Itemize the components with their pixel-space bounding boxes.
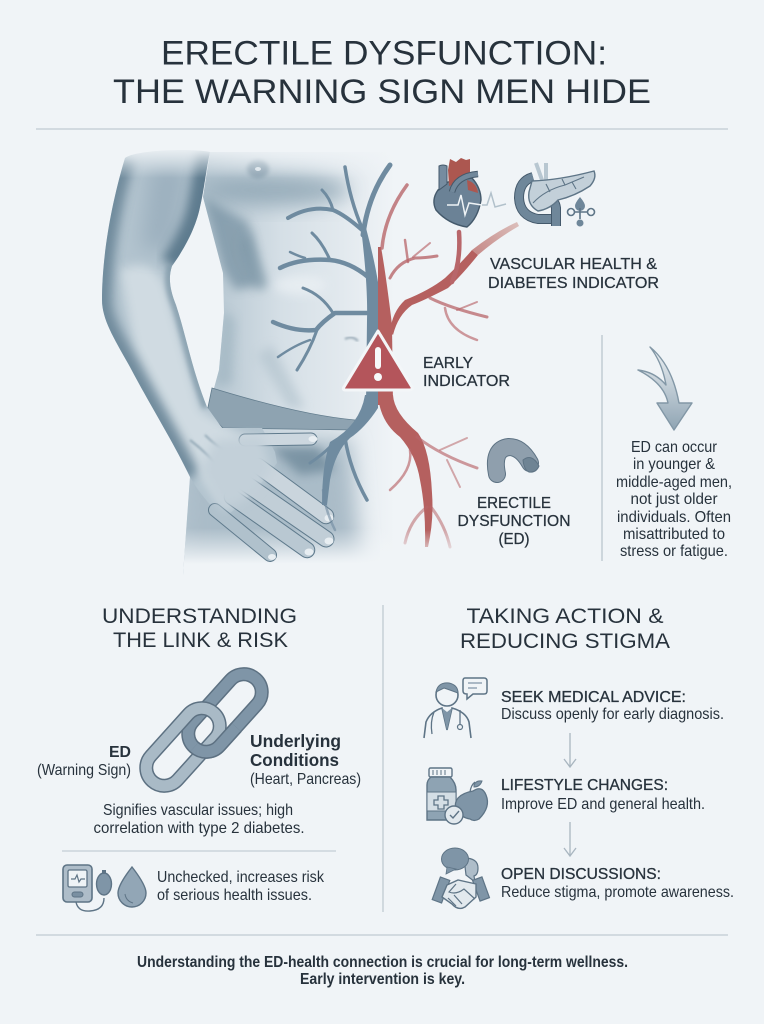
- waistband: [207, 388, 355, 430]
- text: seek medical advice: SEEK MEDICAL ADVICE:: [501, 689, 686, 706]
- icon: pancreas with droplets: [519, 163, 595, 226]
- label: vascular health: DIABETES INDICATOR: [488, 275, 659, 292]
- heading: taking action and reducing stigma: [460, 605, 670, 653]
- callout: age note: misattributed to: [623, 526, 725, 543]
- footer: Early intervention is key.: [300, 971, 465, 988]
- label: ED warning sign: [37, 744, 131, 779]
- title: ERECTILE DYSFUNCTION:: [161, 34, 607, 72]
- icon: heart with ECG: [434, 158, 506, 227]
- heading: taking action and reducing stigma: REDUCING STIGMA: [460, 630, 670, 653]
- label: erectile dysfunction: [458, 495, 570, 548]
- arm and hand: [102, 150, 277, 513]
- text: open discussions: Reduce stigma, promote awareness.: [501, 884, 734, 901]
- label: vascular health: VASCULAR HEALTH &: [490, 256, 657, 273]
- label: underlying conditions: [250, 731, 361, 788]
- label: vascular health: [488, 256, 659, 292]
- text: seek medical advice: [501, 689, 724, 723]
- callout: age note: ED can occur: [631, 439, 718, 456]
- fingers: [215, 436, 334, 560]
- heading: taking action and reducing stigma: TAKING ACTION &: [466, 605, 664, 628]
- footer: Understanding the ED-health connection is crucial for long-term wellness.: [137, 954, 628, 971]
- text: link explanation: Signifies vascular issues; high: [103, 802, 293, 819]
- icon: doctor with speech bubble: [424, 678, 487, 738]
- callout: age note: in younger &: [633, 456, 715, 473]
- label: underlying conditions: Conditions: [250, 750, 339, 770]
- title: [113, 34, 651, 111]
- text: risk note: Unchecked, increases risk: [157, 869, 325, 886]
- icon: curved down arrow: [638, 347, 692, 430]
- text: open discussions: [501, 866, 734, 901]
- arrow: step 1 to 2: [564, 733, 576, 767]
- title: THE WARNING SIGN MEN HIDE: [113, 73, 651, 111]
- label: erectile dysfunction: ERECTILE: [477, 495, 551, 512]
- icon: medicine bottle and apple: [427, 768, 487, 824]
- text: risk note: [157, 869, 325, 904]
- label: ED warning sign: ED: [109, 744, 131, 761]
- label: erectile dysfunction: DYSFUNCTION: [458, 513, 570, 530]
- blue vessel tree: [273, 165, 390, 530]
- text: link explanation: correlation with type 2 diabetes.: [94, 820, 304, 837]
- label: early indicator: [423, 355, 510, 390]
- callout: age note: not just older: [630, 491, 718, 508]
- label: early indicator: INDICATOR: [423, 373, 510, 390]
- text: lifestyle changes: Improve ED and general health.: [501, 796, 705, 813]
- arrow: step 2 to 3: [564, 822, 576, 856]
- label: ED warning sign: (Warning Sign): [37, 762, 131, 779]
- icon: blood drop: [118, 867, 146, 907]
- heading: understanding the link and risk: [102, 605, 297, 652]
- red vessel tree: [378, 185, 519, 547]
- label: underlying conditions: Underlying: [250, 731, 341, 751]
- illustration: male torso with hand on hip: [102, 150, 375, 574]
- callout: age note: stress or fatigue.: [620, 543, 728, 560]
- icon: anatomical ED: [496, 447, 539, 474]
- icon: warning triangle: [343, 331, 412, 390]
- label: erectile dysfunction: (ED): [498, 531, 530, 548]
- heading: understanding the link and risk: THE LINK & RISK: [113, 629, 288, 652]
- text: lifestyle changes: [501, 777, 705, 813]
- text: open discussions: OPEN DISCUSSIONS:: [501, 866, 661, 883]
- text: seek medical advice: Discuss openly for early diagnosis.: [501, 706, 724, 723]
- icon: speech bubbles and handshake: [432, 848, 489, 908]
- callout: age note: individuals. Often: [617, 509, 731, 526]
- icon: blood pressure monitor: [63, 865, 112, 911]
- footer: [137, 954, 628, 988]
- text: risk note: of serious health issues.: [157, 887, 312, 904]
- text: lifestyle changes: LIFESTYLE CHANGES:: [501, 777, 668, 794]
- text: link explanation: [94, 802, 304, 837]
- hand back blending into fingers: [200, 436, 272, 510]
- icon: chain link: [139, 667, 269, 793]
- heading: understanding the link and risk: UNDERSTANDING: [102, 605, 297, 628]
- label: underlying conditions: (Heart, Pancreas): [250, 771, 361, 788]
- callout: age note: [616, 439, 732, 560]
- callout: age note: middle-aged men,: [616, 474, 732, 491]
- label: early indicator: EARLY: [423, 355, 473, 372]
